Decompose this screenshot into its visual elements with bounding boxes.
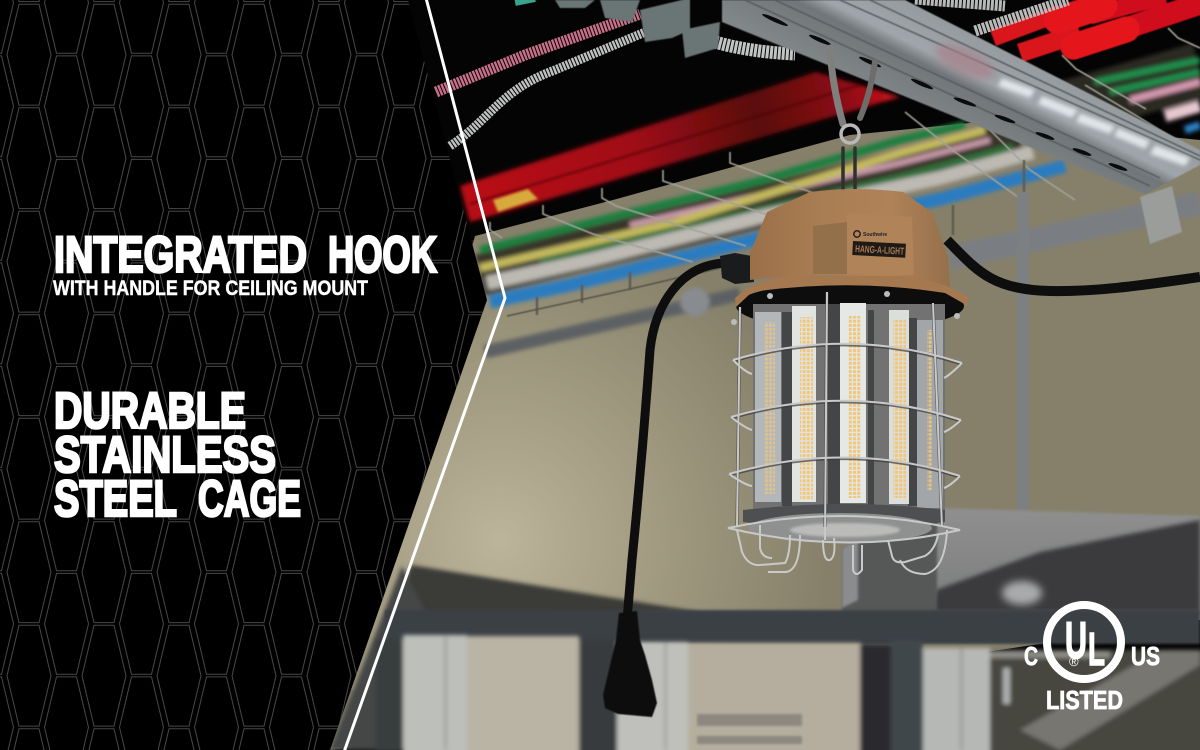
clear lens xyxy=(748,513,932,543)
yellow conduit label xyxy=(493,189,538,212)
left black panel with hexagon pattern xyxy=(0,0,487,750)
wire tray bundles xyxy=(480,60,1200,302)
heading: durable stainless steel cage xyxy=(54,382,301,527)
cage flange bolts xyxy=(731,291,960,325)
dark seam in red conduit xyxy=(470,85,860,204)
left power cord xyxy=(627,263,725,620)
cage shadow lines xyxy=(729,292,962,527)
ceiling darkness xyxy=(330,0,1200,750)
letters US: US xyxy=(1131,641,1160,671)
white chevron divider xyxy=(344,0,505,750)
dark band lower left xyxy=(392,565,700,622)
LED module 1 xyxy=(755,312,781,502)
line 3 xyxy=(54,470,301,527)
dome flange xyxy=(735,276,968,307)
registered mark: ® xyxy=(1069,654,1079,669)
lens highlight xyxy=(790,523,900,537)
red conduit xyxy=(460,72,900,222)
bright wall glow lower left xyxy=(330,240,930,690)
listed: LISTED xyxy=(1046,685,1123,715)
cage rings and bars xyxy=(728,292,962,574)
metal brackets top xyxy=(555,0,720,58)
left grey conduit xyxy=(485,294,740,352)
red pipes upper right xyxy=(993,0,1200,53)
dome shadow xyxy=(813,222,847,274)
background photo: job site ceiling xyxy=(330,0,1200,750)
LED module 2 xyxy=(792,306,816,502)
heading: integrated hook xyxy=(53,226,437,300)
conduit clamp xyxy=(1140,186,1182,244)
LED module 5 xyxy=(917,320,943,508)
UL listed certification logo xyxy=(1024,605,1160,715)
LED module 4 xyxy=(889,310,909,504)
main heading: HOOK xyxy=(328,226,437,283)
right power cord xyxy=(947,240,1200,291)
work light xyxy=(728,189,968,574)
panel fill xyxy=(0,0,487,750)
black ring xyxy=(736,282,964,330)
dome centre panel xyxy=(847,213,914,275)
metal bracket under light xyxy=(842,510,937,612)
drywall blurred print xyxy=(697,714,802,744)
reddish reflection xyxy=(931,38,999,86)
green wire at top xyxy=(515,0,535,2)
pink flexible conduit xyxy=(436,14,640,92)
strut highlights xyxy=(998,78,1190,166)
top beam xyxy=(385,610,1200,644)
main heading: INTEGRATED xyxy=(54,226,307,283)
metal wall plate xyxy=(930,508,1200,612)
lower left corner grey xyxy=(330,566,430,750)
silver conduit behind strut xyxy=(715,42,795,54)
dome housing xyxy=(750,189,950,287)
hexagon texture xyxy=(0,0,487,750)
product name: HANG-A-LIGHT xyxy=(855,244,904,258)
sub heading: WITH HANDLE FOR CEILING MOUNT xyxy=(53,277,368,300)
hanging hook and chain xyxy=(830,48,875,190)
line 3: CAGE xyxy=(198,470,301,527)
body dark gaps xyxy=(782,304,917,506)
lamp body xyxy=(753,304,945,516)
horizontal grey conduit right xyxy=(950,203,1200,258)
line 2: STAINLESS xyxy=(54,426,276,483)
beige wall xyxy=(330,120,1200,750)
cord gland xyxy=(720,253,754,284)
silver flexible conduit xyxy=(450,30,650,146)
UL ring xyxy=(1047,605,1121,679)
drywall and studs row xyxy=(376,635,1200,750)
logo on dome xyxy=(852,231,906,258)
letter L: L xyxy=(1088,623,1105,675)
product badge xyxy=(852,241,906,258)
strut slots xyxy=(761,12,1128,172)
brand name: Southwire xyxy=(863,232,887,238)
conduit fitting xyxy=(680,288,710,316)
wire basket mesh xyxy=(490,28,1200,316)
strut channels xyxy=(745,0,1200,186)
LED module 3 xyxy=(840,303,866,503)
line 3: STEEL xyxy=(54,470,177,527)
cord plug xyxy=(603,611,657,717)
bracket highlight xyxy=(842,540,858,608)
steel strut xyxy=(722,0,1200,194)
vertical conduit xyxy=(1017,192,1029,512)
plate shadow xyxy=(930,520,1200,612)
lamp base xyxy=(743,504,945,528)
line 1: DURABLE xyxy=(54,382,246,439)
light spot xyxy=(1002,581,1042,605)
letter U: U xyxy=(1065,612,1087,670)
silver conduit top right xyxy=(915,0,1068,31)
letter c: C xyxy=(1024,641,1038,671)
